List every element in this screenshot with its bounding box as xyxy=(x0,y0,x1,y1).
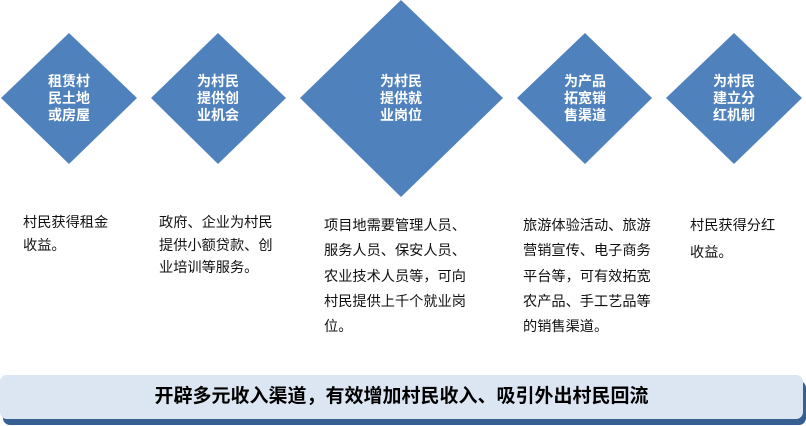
banner shadow xyxy=(3,381,806,425)
text: job positions: 农业技术人员等，可向 xyxy=(324,269,466,285)
text: sales channels: 平台等，可有效拓宽 xyxy=(523,269,651,285)
diamond: entrepreneurship: 为村民 xyxy=(197,73,239,89)
text: job positions xyxy=(324,218,466,335)
text: sales channels: 的销售渠道。 xyxy=(523,319,608,335)
diamond: jobs xyxy=(300,0,503,197)
diamond: entrepreneurship: 提供创 xyxy=(197,90,239,106)
text: rent income xyxy=(23,214,108,254)
text: job positions: 项目地需要管理人员、 xyxy=(324,218,466,234)
text: dividend income: 村民获得分红 xyxy=(690,218,775,234)
diamond: jobs: 提供就 xyxy=(380,90,422,106)
text: loans and training xyxy=(159,214,273,276)
text: loans and training: 政府、企业为村民 xyxy=(159,215,273,231)
diamond: dividends: 红机制 xyxy=(713,107,755,123)
diamond: jobs: 业岗位 xyxy=(380,107,422,123)
diamond: dividends xyxy=(666,33,802,164)
diamond: sales channels: 拓宽销 xyxy=(564,90,606,106)
text: loans and training: 提供小额贷款、创 xyxy=(159,238,273,254)
text: rent income: 收益。 xyxy=(23,238,66,254)
diamond: dividends: 为村民 xyxy=(713,73,755,89)
text: rent income: 村民获得租金 xyxy=(23,215,108,231)
diamond: sales channels xyxy=(517,33,652,164)
text: sales channels: 营销宣传、电子商务 xyxy=(523,243,651,259)
text: job positions: 服务人员、保安人员、 xyxy=(324,243,466,259)
diamond: rent land xyxy=(1,33,137,164)
diamond: sales channels: 售渠道 xyxy=(564,107,606,123)
diamond: entrepreneurship xyxy=(151,33,286,164)
text: job positions: 位。 xyxy=(324,319,352,335)
banner: 开辟多元收入渠道，有效增加村民收入、吸引外出村民回流 xyxy=(154,386,648,407)
diamond: rent land: 民土地 xyxy=(48,90,90,106)
text: sales channels: 旅游体验活动、旅游 xyxy=(523,218,651,234)
diamond: sales channels: 为产品 xyxy=(564,73,606,89)
text: sales channels: 农产品、手工艺品等 xyxy=(523,294,651,310)
diamond: rent land: 租赁村 xyxy=(48,73,90,89)
diamond: dividends: 建立分 xyxy=(713,90,755,106)
text: dividend income xyxy=(690,218,775,261)
text: sales channels xyxy=(523,218,651,335)
banner xyxy=(0,375,803,419)
text: loans and training: 业培训等服务。 xyxy=(159,260,258,276)
diamond: jobs: 为村民 xyxy=(380,73,422,89)
text: dividend income: 收益。 xyxy=(690,245,733,261)
diamond: entrepreneurship: 业机会 xyxy=(197,107,239,123)
diamond: rent land: 或房屋 xyxy=(48,107,90,123)
text: job positions: 村民提供上千个就业岗 xyxy=(324,294,466,310)
